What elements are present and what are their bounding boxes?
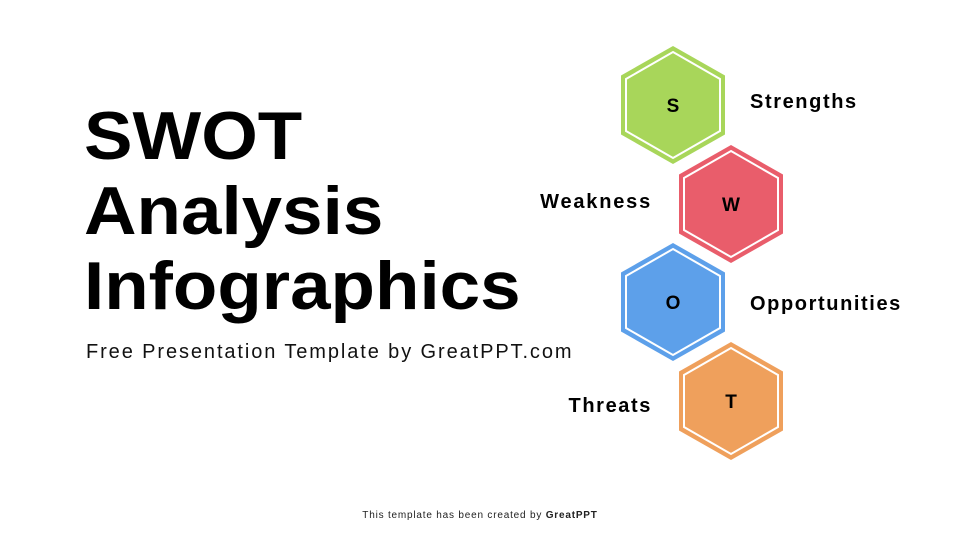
hexagon W: W	[722, 195, 740, 216]
label Threats: Threats	[569, 395, 652, 417]
hexagon S	[621, 46, 725, 164]
subtitle: Free Presentation Template by GreatPPT.com	[86, 341, 573, 363]
hexagon S: S	[667, 96, 679, 117]
label Strengths: Strengths	[750, 91, 858, 113]
hexagon T	[679, 342, 783, 460]
label Opportunities: Opportunities	[750, 293, 902, 315]
label Weakness: Weakness	[540, 191, 652, 213]
hexagon W	[679, 145, 783, 263]
footer: This template has been created by GreatPPT	[362, 510, 598, 521]
title	[84, 98, 521, 324]
hexagon O	[621, 243, 725, 361]
hexagon O: O	[666, 293, 680, 314]
title: Analysis	[84, 173, 383, 249]
title: SWOT	[84, 98, 302, 174]
hexagon T: T	[725, 392, 737, 413]
title: Infographics	[84, 248, 521, 324]
